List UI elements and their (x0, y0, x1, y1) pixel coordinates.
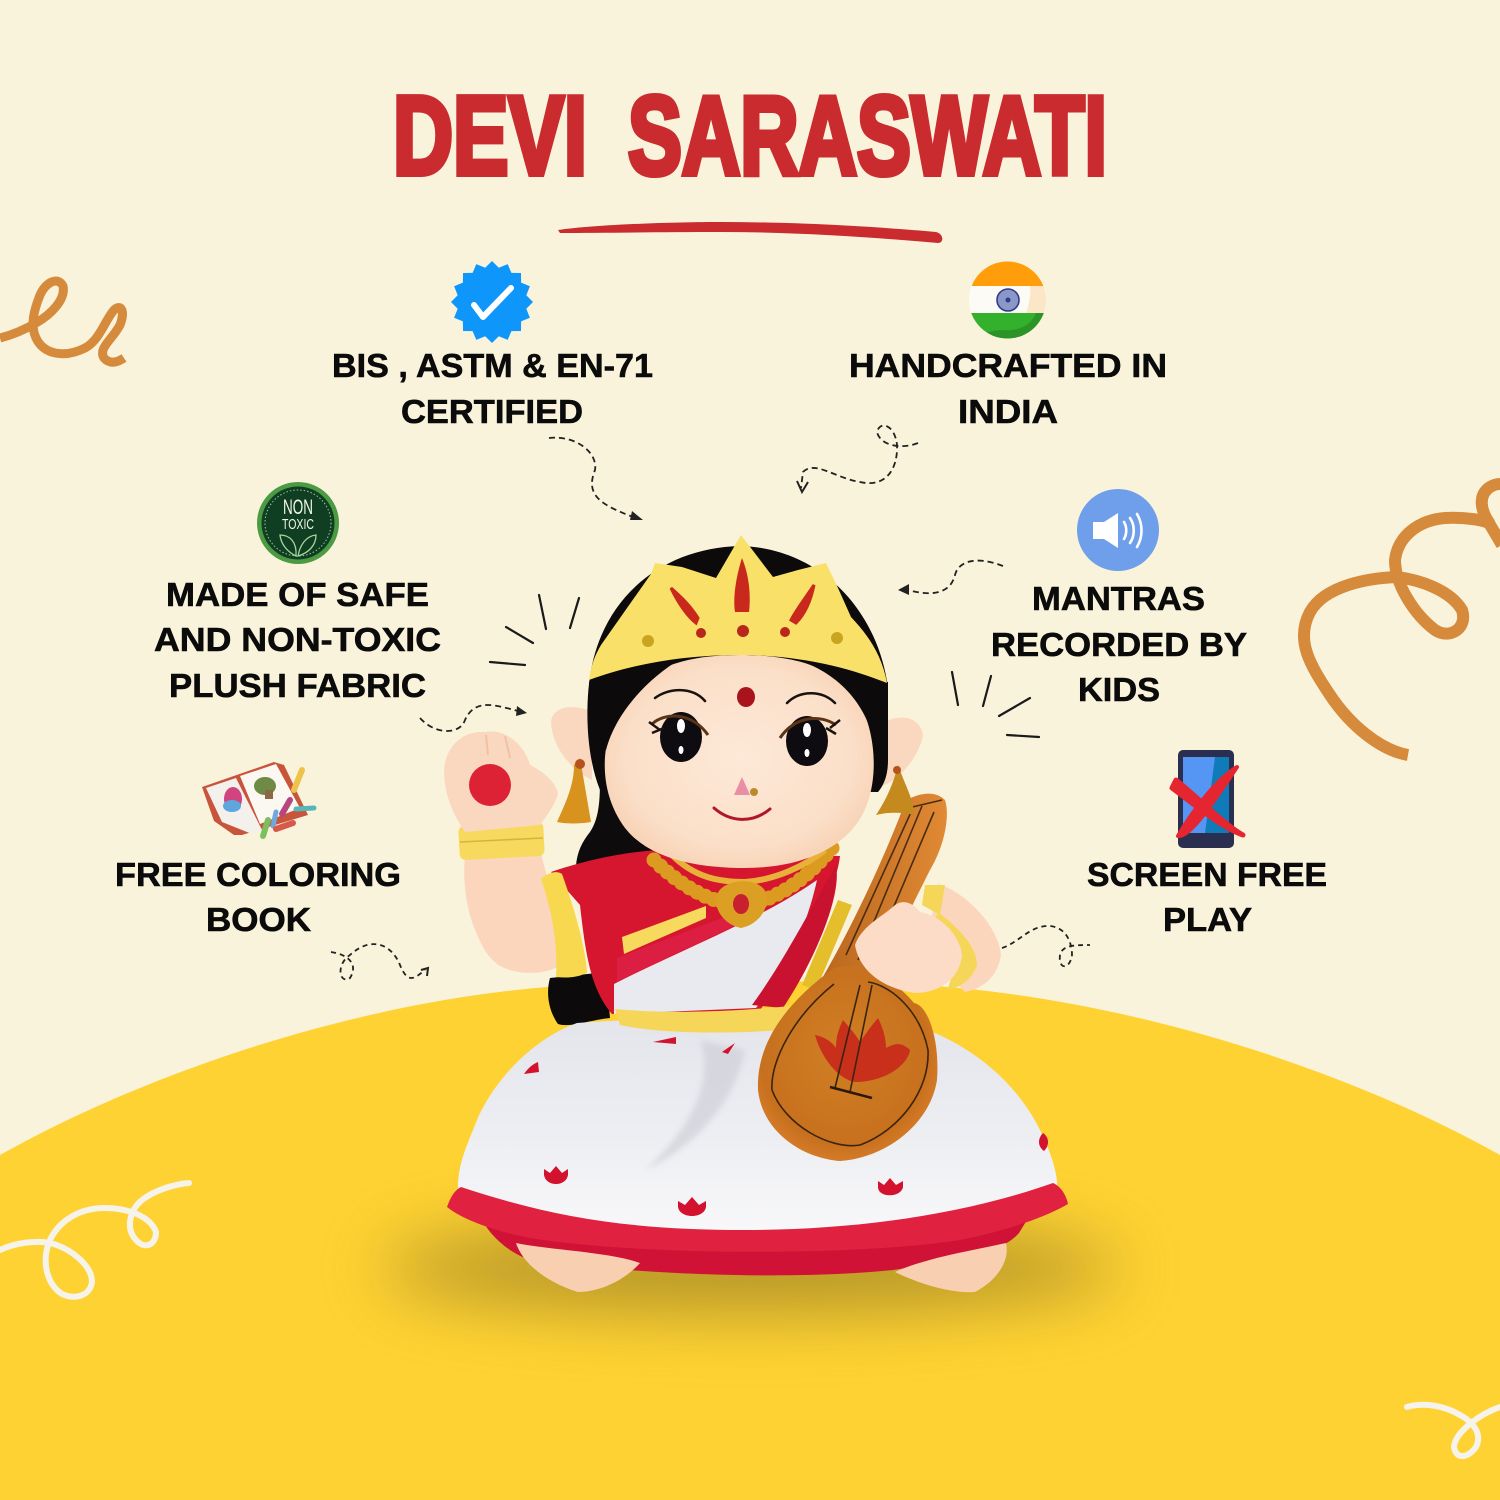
skirt red base (480, 1215, 1030, 1275)
left ear (551, 707, 592, 780)
text block: PLUSH FABRIC (169, 667, 426, 704)
right hand (855, 902, 962, 993)
icon: blue verified badge (451, 261, 533, 343)
text block (1087, 856, 1327, 938)
icon: non toxic seal (257, 482, 339, 564)
eyebrows (655, 690, 835, 703)
sari red sash (617, 915, 738, 982)
text block: FREE COLORING (115, 856, 401, 893)
icon: non toxic seal: NON (283, 496, 313, 519)
text block (115, 856, 401, 938)
title: DEVI (393, 74, 587, 198)
smile (714, 808, 770, 819)
text block: MANTRAS (1032, 580, 1205, 617)
text block (154, 576, 441, 704)
red jewel on palm (469, 764, 511, 806)
text block: RECORDED BY (991, 626, 1247, 663)
feet (516, 1243, 1007, 1292)
waist belt (615, 1006, 790, 1033)
text block: KIDS (1078, 671, 1160, 708)
title (393, 74, 1107, 198)
title: SARASWATI (628, 74, 1107, 198)
text block: INDIA (958, 393, 1058, 430)
plush doll: Devi Saraswati (444, 535, 1068, 1292)
hair dome (587, 546, 888, 792)
lotus on veena (815, 1018, 910, 1082)
feature: screen free play (1087, 750, 1327, 938)
decorative squiggle: bottom left (0, 1183, 189, 1297)
white skirt (458, 1018, 1057, 1232)
ground shadow (380, 1224, 1120, 1312)
white sari torso (614, 880, 817, 1014)
text block: BIS , ASTM & EN-71 (332, 347, 653, 384)
icon: speaker (1077, 489, 1159, 571)
raised arm (464, 850, 562, 973)
arrow: coloring book to doll (331, 944, 428, 979)
feature: BIS certified (332, 261, 653, 430)
right arm (925, 884, 1001, 992)
arrow: certified to doll (549, 438, 643, 520)
text block: BOOK (206, 901, 311, 938)
text block: HANDCRAFTED IN (849, 347, 1167, 384)
arrow: mantras to doll (898, 561, 1003, 595)
title underline (558, 222, 942, 243)
veena body (758, 966, 937, 1161)
text block: MADE OF SAFE (166, 576, 429, 613)
text block (991, 580, 1247, 708)
burst lines: left (490, 595, 579, 665)
icon: India flag circle (969, 262, 1046, 338)
icon: non toxic seal: TOXIC (282, 516, 314, 533)
right earring (876, 765, 914, 815)
right bangle (934, 913, 977, 990)
veena neck (815, 794, 947, 990)
sari red fall (752, 866, 837, 1008)
yellow hill (0, 981, 1500, 1500)
decorative squiggle: top left (0, 281, 124, 362)
braid (548, 972, 610, 1025)
right ear (882, 718, 923, 786)
right sleeve (922, 885, 945, 915)
bindi (737, 687, 755, 707)
feature: non toxic fabric (154, 482, 441, 704)
red skirt hem (447, 1183, 1068, 1252)
raised hand (444, 731, 558, 832)
skirt fold shadows (645, 1040, 745, 1170)
burst lines: right (952, 672, 1039, 737)
nose (734, 777, 758, 796)
text block (849, 347, 1167, 430)
feature: handcrafted in India (849, 258, 1167, 430)
arrow: India to doll (797, 426, 918, 492)
text block: AND NON-TOXIC (154, 621, 441, 658)
left earring (557, 758, 591, 824)
fringe hair (589, 657, 888, 750)
icon: phone crossed out (1172, 750, 1243, 848)
back hair (576, 780, 660, 866)
arrow: screen free to doll (1002, 926, 1090, 966)
sari yellow sash (622, 906, 706, 954)
text block: PLAY (1163, 901, 1252, 938)
bangle left (458, 822, 545, 860)
blouse (551, 850, 840, 1014)
face (605, 655, 874, 868)
icon: book and crayons (202, 762, 314, 836)
text block (332, 347, 653, 430)
veena yellow strip (802, 900, 852, 990)
eyes (649, 712, 840, 766)
decorative squiggle: top right (1304, 484, 1500, 755)
feature: mantras (991, 489, 1247, 708)
sleeve trim (541, 872, 587, 978)
decorative squiggle: bottom right (1407, 1405, 1500, 1456)
text block: CERTIFIED (401, 393, 583, 430)
lotus motifs on skirt (524, 1037, 1048, 1216)
feature: free coloring book (115, 762, 401, 938)
arrow: fabric to doll (420, 705, 527, 731)
text block: SCREEN FREE (1087, 856, 1327, 893)
necklace (654, 848, 832, 928)
crown (589, 535, 887, 683)
